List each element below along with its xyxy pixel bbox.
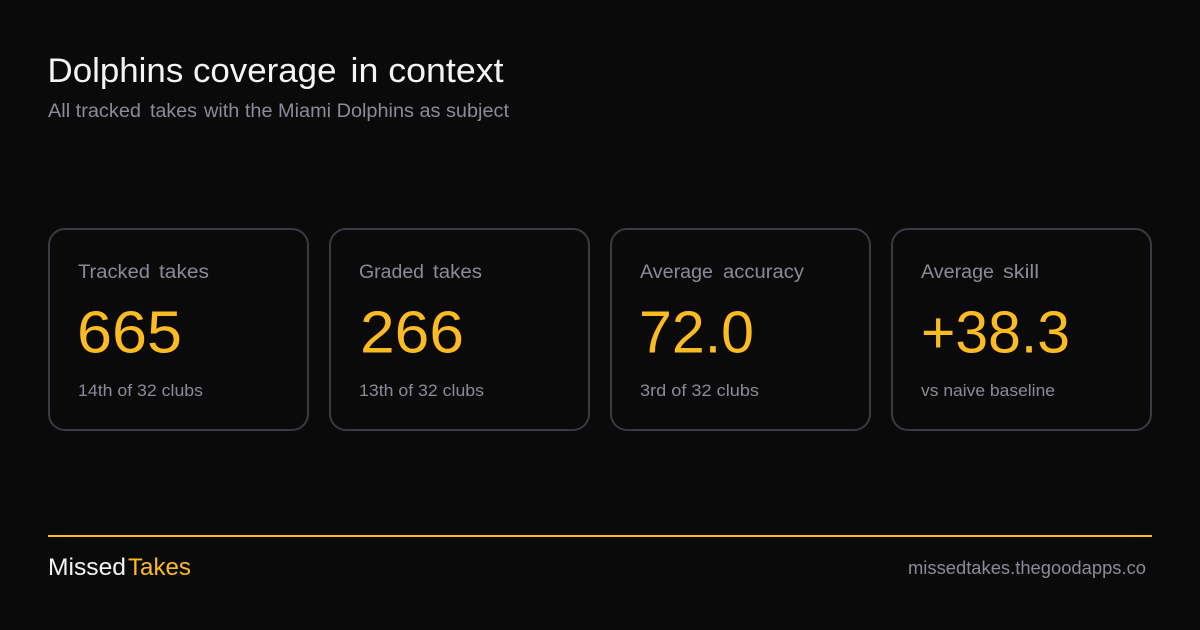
label: average skill: Average [921, 262, 994, 283]
panel: average skill [892, 229, 1151, 430]
label: average accuracy: Average [640, 262, 713, 283]
note: 13th of 32 clubs: 13th of 32 clubs [359, 381, 484, 400]
footer rule [48, 535, 1152, 537]
title: in context [350, 52, 504, 90]
value: 266: 266 [360, 300, 464, 366]
subtitle: takes [150, 101, 197, 122]
note: 14th of 32 clubs: 14th of 32 clubs [78, 381, 203, 400]
site url: missedtakes.thegoodapps.co [908, 558, 1146, 578]
label: tracked takes: Tracked [78, 262, 150, 283]
value: 665: 665 [77, 300, 182, 366]
label: average accuracy: accuracy [723, 262, 805, 283]
value: +38.3: +38.3 [921, 300, 1070, 366]
label: graded takes: takes [433, 262, 482, 283]
panel: graded takes [330, 229, 589, 430]
note: 3rd of 32 clubs: 3rd of 32 clubs [640, 381, 759, 400]
label: graded takes: Graded [359, 262, 424, 283]
note: vs naive baseline: vs naive baseline [921, 381, 1055, 400]
logo [48, 554, 191, 581]
label: tracked takes: takes [159, 262, 209, 283]
subtitle: All tracked [48, 101, 141, 122]
panel: tracked takes [49, 229, 308, 430]
label: average skill: skill [1003, 262, 1039, 283]
logo: Missed [48, 554, 126, 581]
value: 72.0: 72.0 [639, 300, 754, 366]
subtitle: with the Miami Dolphins as subject [203, 101, 510, 122]
panel: average accuracy [611, 229, 870, 430]
title: Dolphins coverage [48, 52, 336, 90]
logo: Takes [128, 554, 191, 581]
